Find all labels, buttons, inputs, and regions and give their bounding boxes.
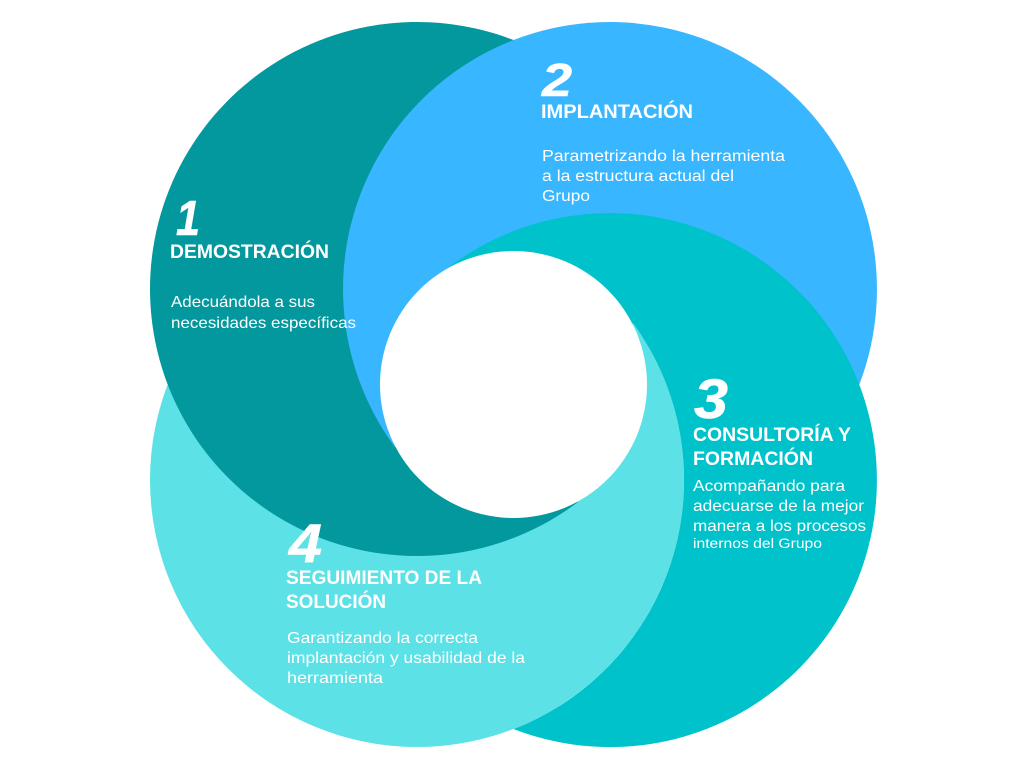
heading: implantación: IMPLANTACIÓN: [541, 101, 693, 123]
heading: demostración: DEMOSTRACIÓN: [170, 241, 329, 263]
description 4: [287, 630, 525, 687]
description 3: Acompañando para: [693, 478, 845, 495]
block 3: consultoría y formación: [693, 367, 866, 551]
number 1: 1: [176, 192, 200, 246]
number 4: 4: [288, 512, 322, 574]
description 2: a la estructura actual del: [542, 168, 734, 185]
description 4: herramienta: [287, 670, 383, 687]
description 2: Parametrizando la herramienta: [542, 148, 785, 165]
description 1: Adecuándola a sus: [171, 294, 315, 311]
description 3: internos del Grupo: [693, 536, 822, 551]
description 4: Garantizando la correcta: [287, 630, 478, 647]
block 4: seguimiento de la solución: [286, 512, 525, 687]
heading: consultoría y formación: [693, 424, 851, 470]
heading: seguimiento de la solución: SOLUCIÓN: [286, 591, 386, 613]
block 1: demostración: [170, 192, 356, 332]
description 1: necesidades específicas: [171, 315, 356, 332]
number 2: 2: [541, 54, 572, 106]
heading: consultoría y formación: FORMACIÓN: [693, 448, 813, 470]
description 3: [693, 478, 866, 551]
description 2: [542, 148, 785, 205]
block 2: implantación: [541, 54, 785, 205]
segment 4: light turquoise ring: [150, 213, 684, 747]
description 4: implantación y usabilidad de la: [287, 650, 525, 667]
centre white circle: [380, 251, 647, 518]
description 2: Grupo: [542, 188, 590, 205]
number 3: 3: [694, 367, 728, 430]
description 3: adecuarse de la mejor: [693, 498, 865, 515]
description 1: [171, 294, 356, 332]
segment 2: sky blue ring: [343, 22, 877, 447]
segment 3: cyan ring: [450, 213, 877, 747]
heading: seguimiento de la solución: [286, 568, 482, 613]
segment 1: dark teal ring: [150, 22, 578, 556]
description 3: manera a los procesos: [693, 518, 866, 535]
heading: consultoría y formación: CONSULTORÍA Y: [693, 424, 851, 446]
heading: seguimiento de la solución: SEGUIMIENTO DE LA: [286, 568, 482, 589]
